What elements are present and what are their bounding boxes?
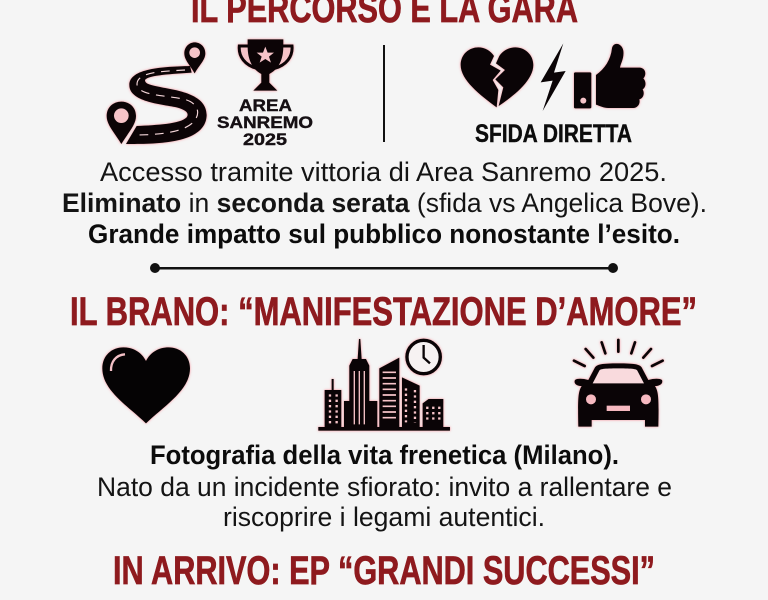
label: area sanremo 2025 xyxy=(217,96,313,149)
label: area sanremo 2025: 2025 xyxy=(243,130,287,149)
text block: brano xyxy=(97,440,672,532)
text block: brano: riscoprire i legami autentici. xyxy=(223,502,545,532)
text block: gara: Grande impatto sul pubblico nonostante l’esito. xyxy=(88,219,680,249)
divider: vertical xyxy=(383,45,385,142)
icon: broken heart xyxy=(461,47,533,107)
text block: brano: Fotografia della vita frenetica (Milano). xyxy=(150,440,619,470)
text block: gara: Accesso tramite vittoria di Area Sanremo 2025. xyxy=(100,157,667,187)
icon: heart xyxy=(102,347,190,423)
icon: city with clock xyxy=(318,339,450,431)
text block: gara xyxy=(62,157,707,249)
icon: winding road with pins xyxy=(107,42,207,144)
label: sfida diretta: SFIDA DIRETTA xyxy=(475,120,632,148)
icon: thumbs up xyxy=(574,44,645,108)
icon: car with alert rays xyxy=(574,340,663,427)
label: area sanremo 2025: AREA xyxy=(239,96,292,115)
icon: lightning bolt xyxy=(541,43,566,111)
icon: trophy xyxy=(239,39,292,91)
label: area sanremo 2025: SANREMO xyxy=(217,113,313,132)
text block: gara: Eliminato in seconda serata (sfida vs Angelica Bove). xyxy=(62,188,707,218)
text block: brano: Nato da un incidente sfiorato: invito a rallentare e xyxy=(97,472,672,502)
